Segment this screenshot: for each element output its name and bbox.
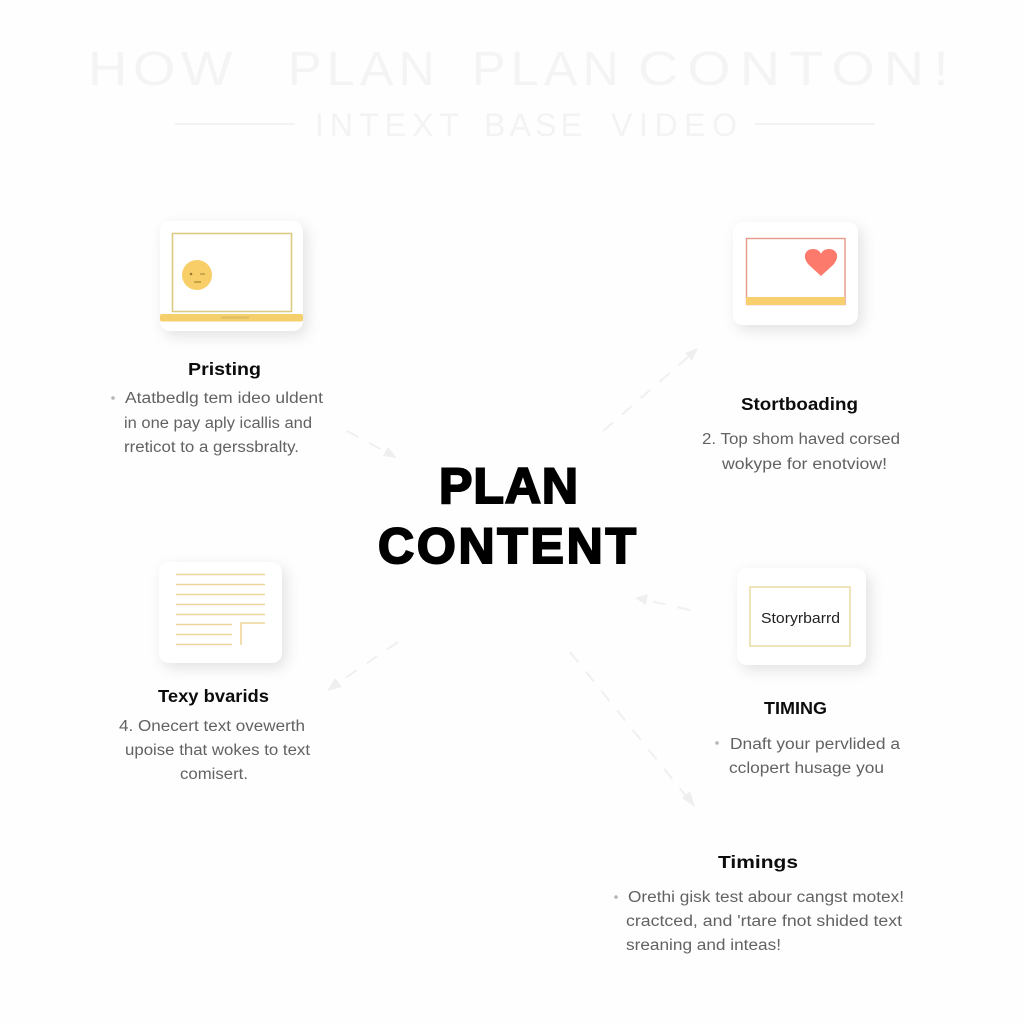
title: PLAN (472, 43, 624, 96)
icon: laptop with face (160, 221, 303, 331)
heading: timings: Timings (718, 852, 798, 872)
text block: stortboading (702, 431, 900, 473)
subtitle: VIDEO (611, 107, 737, 143)
subtitle (175, 107, 875, 143)
central heading: CONTENT (378, 518, 636, 574)
text block: timings: sreaning and inteas! (626, 937, 781, 954)
text block: stortboading: wokype for enotviow! (721, 456, 887, 473)
text block: stortboading: 2. Top shom haved corsed (702, 431, 900, 448)
heading: timing: TIMING (764, 698, 827, 718)
text block: timing: Dnaft your pervlided a (730, 736, 900, 753)
title: HOW (88, 43, 238, 96)
subtitle: INTEXT (315, 107, 459, 143)
arrow: to texy bvarids (327, 642, 398, 691)
arrow: to timings (570, 652, 695, 807)
heading: pristing: Pristing (188, 359, 261, 379)
text block: texy bvarids (119, 718, 311, 783)
heading: stortboading: Stortboading (741, 394, 858, 414)
icon: storyboard frame (737, 568, 866, 665)
arrow: to centre from timing (635, 594, 690, 610)
panel: timings (614, 852, 904, 954)
central heading: PLAN (439, 458, 578, 514)
text block: timing (715, 736, 900, 777)
icon: frame with heart (733, 222, 858, 325)
text block: pristing: Atatbedlg tem ideo uldent (125, 390, 324, 407)
text block: pristing: rreticot to a gerssbralty. (124, 439, 299, 456)
icon: text document (159, 562, 282, 663)
arrow: to stortboading (603, 348, 698, 431)
title: PLAN (288, 43, 440, 96)
panel: pristing (111, 221, 324, 456)
text block: texy bvarids: 4. Onecert text ovewerth (119, 718, 305, 735)
text block: timings: cractced, and 'rtare fnot shided text (626, 913, 903, 930)
text block: texy bvarids: upoise that wokes to text (125, 742, 311, 759)
central heading (378, 458, 636, 574)
title (88, 43, 958, 96)
subtitle: BASE (484, 107, 582, 143)
panel: texy bvarids (119, 562, 311, 783)
text block: pristing: in one pay aply icallis and (124, 415, 312, 432)
title: CONTON! (638, 43, 958, 96)
panel: storyboarding (702, 222, 900, 473)
text block: timings: Orethi gisk test abour cangst motex! (628, 889, 904, 906)
icon: storyboard frame: Storyrbarrd (761, 610, 840, 627)
panel: timing (715, 568, 900, 777)
text block: timings (614, 889, 904, 954)
heading: texy bvarids: Texy bvarids (158, 686, 269, 706)
text block: texy bvarids: comisert. (180, 766, 248, 783)
text block: timing: cclopert husage you (729, 760, 884, 777)
text block: pristing (111, 390, 324, 456)
arrow: to centre from pristing (347, 431, 397, 458)
